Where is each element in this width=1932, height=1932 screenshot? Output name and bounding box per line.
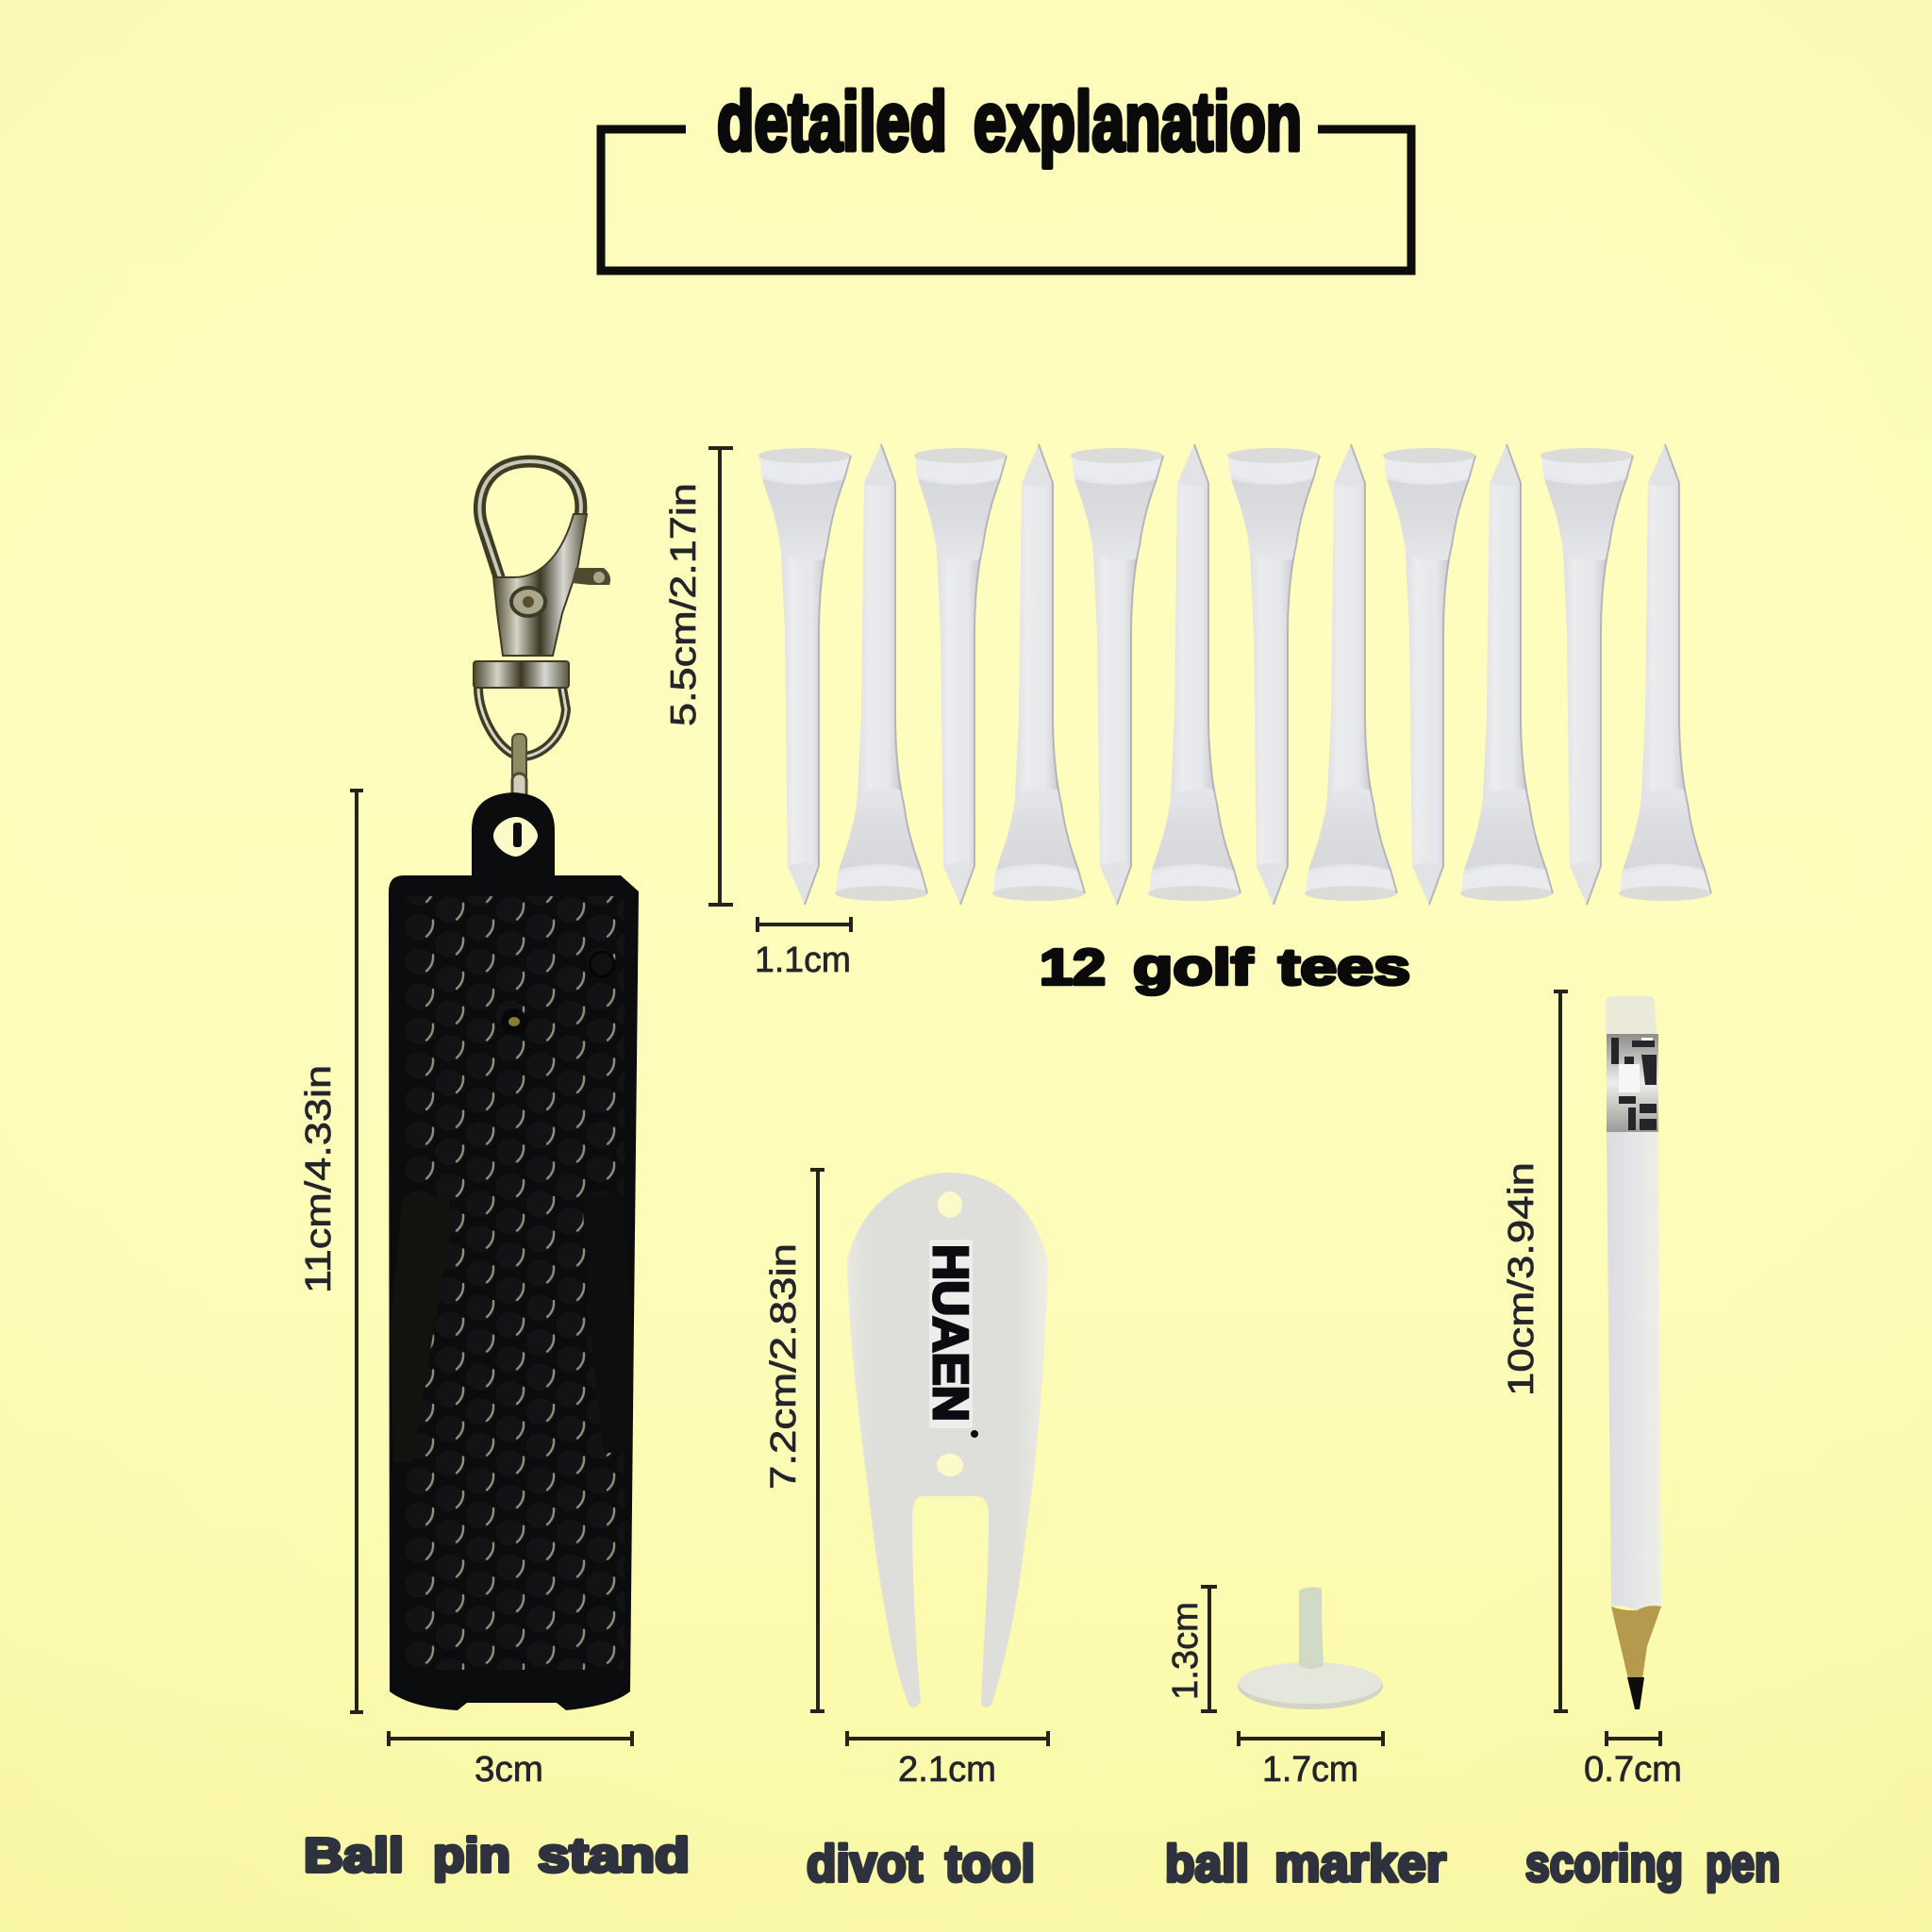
title: [717, 75, 1302, 168]
dimension: marker height: [1166, 1587, 1217, 1711]
dimension: divot width: 2.1cm: [898, 1750, 996, 1790]
dimension: divot height: [764, 1170, 824, 1711]
panel: divot tool: [847, 1173, 1048, 1707]
logo: HUAEN: [923, 1244, 977, 1422]
dimension: pen height: [1502, 991, 1568, 1711]
tee 6: [1148, 444, 1241, 901]
heading: 12 golf tees: [1040, 940, 1410, 996]
dimension: tee height: [664, 448, 733, 905]
dimple texture: [406, 896, 625, 1670]
panel: ball marker: [1238, 1587, 1383, 1709]
panel: golf tees: [758, 444, 1711, 905]
heading: 12 golf tees: tees: [1278, 940, 1410, 996]
tee 12: [1619, 444, 1711, 901]
label: scoring pen: pen: [1706, 1834, 1780, 1892]
label: divot tool: [807, 1834, 1035, 1892]
gold rivet: [501, 1008, 527, 1035]
tee 1: [758, 448, 851, 905]
ferrule: [1607, 1034, 1658, 1132]
label: ball marker: ball: [1165, 1834, 1249, 1892]
link through tab: [513, 823, 522, 847]
screw: [590, 952, 614, 976]
tee 7: [1227, 448, 1320, 905]
device body: [389, 792, 639, 1710]
icon: swivel clip: [474, 461, 610, 845]
left belt clip: [391, 1195, 450, 1462]
tee 11: [1541, 448, 1633, 905]
dimension: stand width: 3cm: [475, 1750, 543, 1790]
dimension: tee width: 1.1cm: [755, 941, 851, 980]
title: detailed: [717, 75, 947, 168]
label: ball pin stand: stand: [538, 1828, 690, 1882]
label: divot tool: tool: [945, 1834, 1035, 1892]
tee 8: [1305, 444, 1397, 901]
title frame: [601, 129, 1411, 271]
wood tip: [1611, 1606, 1661, 1679]
dimension: pen width: 0.7cm: [1584, 1750, 1682, 1790]
tee 5: [1071, 448, 1163, 905]
dimension: pen height: 10cm/3.94in: [1502, 1162, 1541, 1396]
dimension: stand width: [389, 1731, 632, 1790]
right belt clip: [582, 1195, 632, 1453]
dimension: stand height: [299, 791, 363, 1712]
label: ball pin stand: [304, 1828, 690, 1882]
panel: scoring pen: [1606, 996, 1661, 1709]
dimension: pen width: [1584, 1731, 1682, 1790]
dimension: divot height: 7.2cm/2.83in: [764, 1243, 804, 1490]
label: ball marker: [1165, 1834, 1446, 1892]
label: ball marker: marker: [1274, 1834, 1446, 1892]
tee 10: [1460, 444, 1553, 901]
dimension: marker width: 1.7cm: [1262, 1750, 1358, 1790]
title: explanation: [974, 75, 1302, 168]
label: ball pin stand: pin: [433, 1828, 510, 1882]
label: ball pin stand: Ball: [304, 1828, 404, 1882]
tab hole: [493, 817, 538, 857]
eraser: [1606, 996, 1657, 1034]
dimension: stand height: 11cm/4.33in: [299, 1065, 339, 1293]
top hole: [938, 1191, 962, 1218]
panel: ball pin stand: [389, 461, 639, 1710]
dimension: marker height: 1.3cm: [1166, 1602, 1206, 1700]
label: divot tool: divot: [807, 1834, 923, 1892]
tee 4: [992, 444, 1085, 901]
dimension: divot width: [847, 1731, 1048, 1790]
dimension: tee height: 5.5cm/2.17in: [664, 483, 704, 726]
tee 9: [1383, 448, 1475, 905]
tee 3: [914, 448, 1007, 905]
bottom hole: [937, 1454, 963, 1476]
dimension: tee width: [755, 917, 851, 980]
label: scoring pen: scoring: [1525, 1834, 1683, 1892]
graphite: [1627, 1677, 1644, 1709]
dimension: marker width: [1239, 1731, 1383, 1790]
heading: 12 golf tees: 12: [1040, 940, 1106, 996]
tee 2: [835, 444, 927, 901]
heading: 12 golf tees: golf: [1133, 940, 1254, 996]
barrel: [1607, 1132, 1661, 1611]
